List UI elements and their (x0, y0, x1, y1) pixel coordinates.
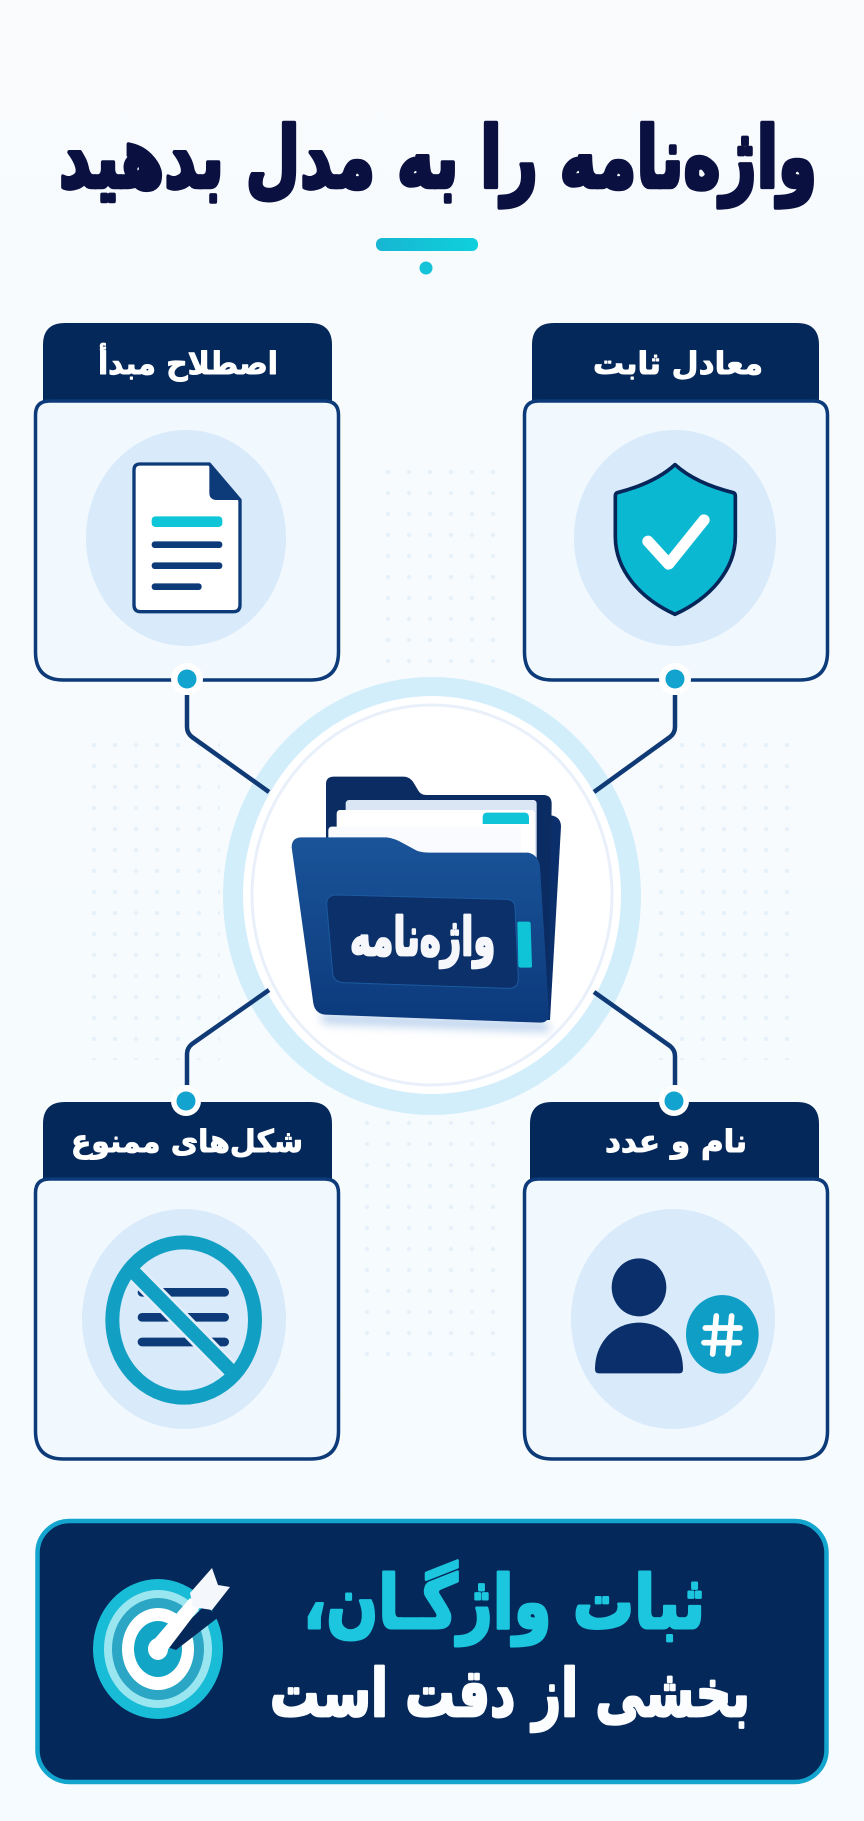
icon circle (82, 1209, 286, 1429)
heading tab: source term (43, 323, 332, 403)
heading tab: forbidden forms (43, 1102, 332, 1182)
icon: target with arrow (93, 1568, 230, 1719)
card (36, 1179, 338, 1459)
icon: document (134, 464, 241, 612)
node: name and number (659, 1086, 689, 1116)
folder label: واژه‌نامه (350, 907, 495, 968)
heading tab: fixed equivalent: معادل ثابت (593, 346, 763, 382)
icon: glossary folder (292, 777, 561, 1032)
icon: person with number sign (595, 1258, 759, 1374)
heading tab: source term: اصطلاح مبدأ (98, 343, 278, 382)
node: fixed equivalent (659, 663, 691, 695)
heading tab: name and number: نام و عدد (605, 1124, 747, 1160)
card (524, 1179, 828, 1459)
node: source term (171, 663, 203, 695)
title divider (376, 238, 478, 274)
card (36, 401, 338, 680)
node: forbidden forms (171, 1086, 201, 1116)
panel: forbidden forms (36, 1102, 338, 1459)
icon circle (86, 430, 286, 646)
connector lines (187, 695, 675, 1085)
card (524, 401, 828, 680)
heading tab: fixed equivalent (532, 323, 819, 403)
heading tab: forbidden forms: شکل‌های ممنوع (71, 1124, 303, 1160)
icon circle (571, 1209, 775, 1429)
panel: fixed equivalent (524, 323, 828, 680)
bottom banner (38, 1521, 826, 1782)
banner background (38, 1521, 826, 1782)
panel: source term (36, 323, 338, 680)
icon circle (574, 430, 776, 646)
central hub (223, 677, 641, 1115)
heading tab: name and number (530, 1102, 819, 1182)
hub rings (223, 677, 641, 1115)
icon: shield with check (615, 465, 735, 614)
banner text line 1: ثبات واژگـان، (303, 1560, 705, 1647)
icon: prohibited text (112, 1242, 255, 1398)
panel: name and number (524, 1102, 828, 1459)
